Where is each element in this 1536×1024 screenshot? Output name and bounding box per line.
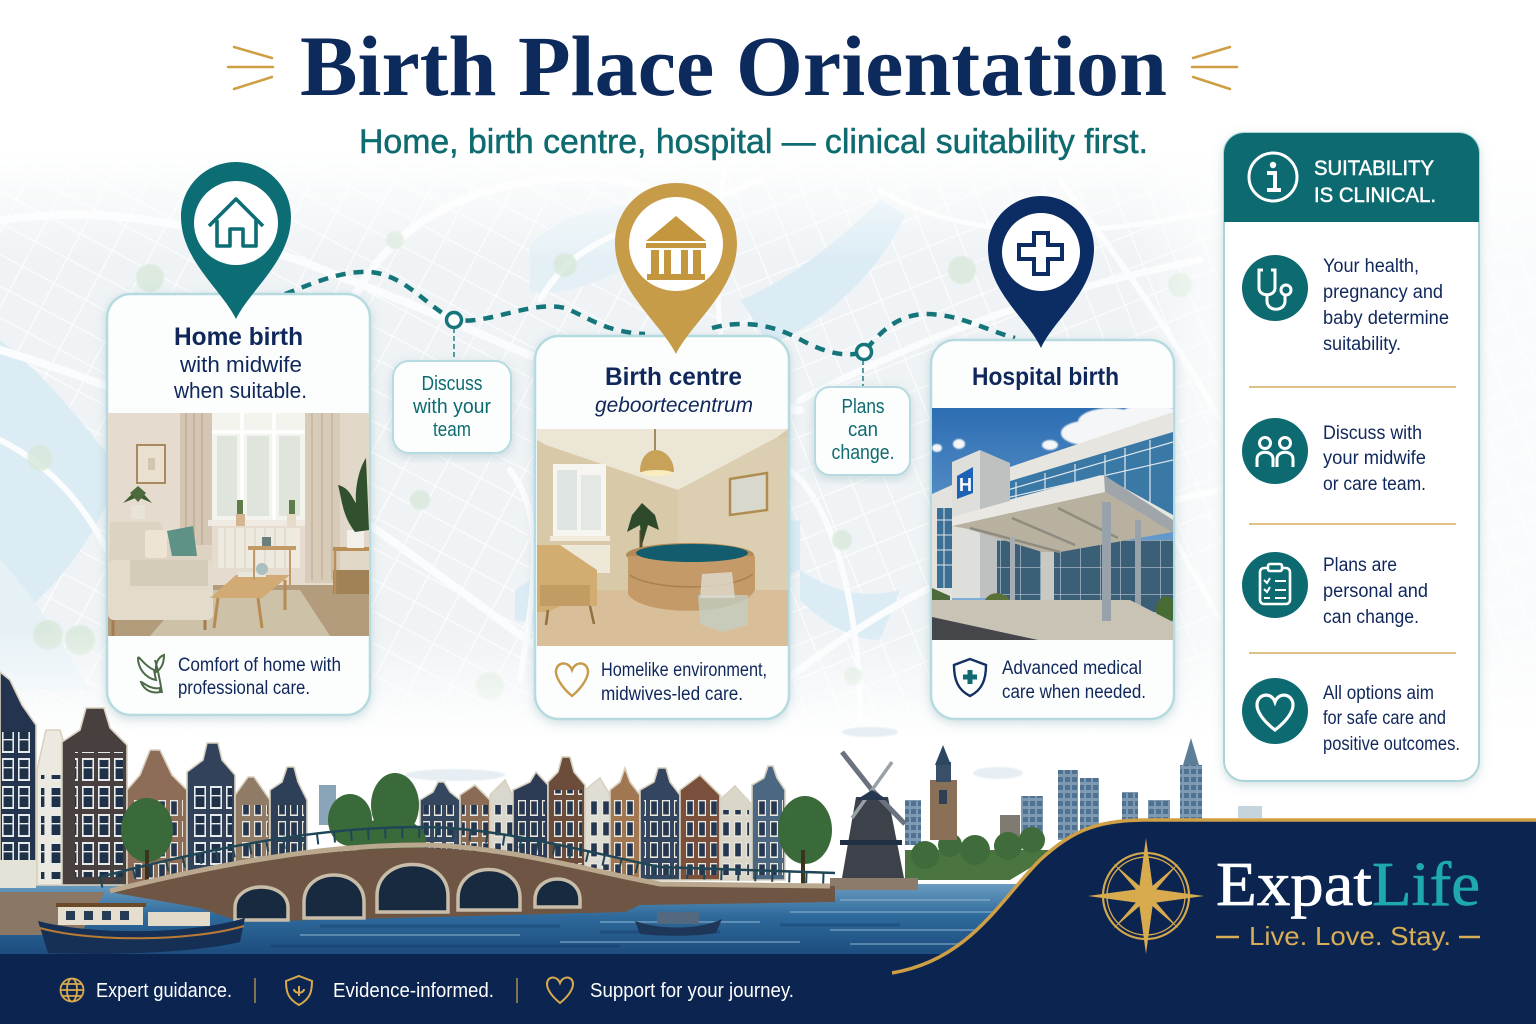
panel item: health: suitability. [1323, 334, 1401, 355]
panel item: discuss: Discuss with [1323, 423, 1422, 444]
footer divider [255, 978, 517, 1003]
illustration: quay left [0, 892, 105, 935]
panel header: SUITABILITY [1314, 156, 1434, 180]
logo: compass [1088, 838, 1204, 954]
callout: plans can change: can [848, 419, 878, 441]
home birth subheading: with midwife [179, 352, 302, 377]
callout: discuss with your team: Discuss [422, 373, 482, 395]
illustration: canal houses right row [420, 757, 785, 880]
columns [1102, 502, 1111, 600]
logo panel [892, 820, 1536, 1024]
illustration: small boat [635, 912, 722, 936]
icon: leaf sprig [138, 655, 164, 693]
panel item: plans: Plans are [1323, 555, 1397, 576]
upper glazed wing [992, 412, 1173, 520]
footer: evidence-informed [286, 976, 494, 1005]
icon: shield [286, 976, 312, 1005]
logo wordmark: Life [1372, 851, 1480, 919]
home birth note: Comfort of home with [178, 655, 341, 676]
callout: discuss with your team: with your [412, 396, 491, 418]
panel: birth centre [535, 336, 789, 719]
hospital birth note: care when needed. [1002, 682, 1146, 703]
ground [932, 600, 1173, 640]
footer: support [547, 977, 794, 1003]
panel item: safe care: All options aim [1323, 683, 1434, 704]
illustration: right bank trees [830, 827, 1060, 890]
icon: globe [60, 978, 84, 1002]
callout: discuss with your team: team [433, 419, 471, 441]
icon: heart [1242, 678, 1308, 744]
panel: home birth [107, 294, 370, 715]
photo: birth room with pool [537, 429, 788, 646]
map pin: birth centre [615, 183, 737, 354]
panel item: health [1242, 255, 1449, 355]
tower [952, 450, 980, 598]
route waypoint: discuss [446, 312, 462, 328]
callout: plans can change: Plans [842, 396, 884, 418]
panel item: safe care [1242, 678, 1460, 755]
illustration: canal houses left row [0, 672, 307, 888]
hospital birth note [954, 658, 1146, 703]
footer: expert guidance [60, 978, 232, 1002]
title: Birth Place Orientation [300, 18, 1167, 114]
birth centre note [556, 660, 767, 705]
route waypoint: plans [856, 344, 872, 360]
logo wordmark: Expat [1216, 851, 1372, 919]
illustration: houseboat [38, 903, 245, 954]
icon: medical cross [1019, 233, 1062, 274]
home birth note [138, 655, 341, 699]
footer: support: Support for your journey. [590, 980, 794, 1002]
icon: medical shield [954, 659, 986, 696]
canopy underside [952, 492, 1173, 552]
logo wordmark [1216, 851, 1480, 919]
icon: heart [547, 977, 573, 1003]
logo tagline: Live. Love. Stay. [1249, 921, 1451, 951]
home birth note: professional care. [178, 678, 310, 699]
home birth heading: Home birth [174, 323, 303, 351]
icon: heart outline [556, 663, 588, 696]
panel item: plans [1242, 552, 1428, 628]
map pin: hospital birth [988, 196, 1094, 348]
footer band [0, 954, 1536, 1024]
icon: house [209, 199, 263, 246]
illustration: windmill [840, 752, 905, 878]
panel header: IS CLINICAL. [1314, 183, 1436, 207]
panel item: safe care: for safe care and [1323, 708, 1446, 729]
photo: hospital building [932, 405, 1180, 640]
route: dashed path between locations [268, 272, 1015, 354]
route waypoint connector lines [454, 328, 863, 388]
home birth subheading [173, 352, 307, 403]
illustration: church tower [930, 745, 957, 840]
logo panel gold edge [892, 820, 1536, 973]
divider [1249, 387, 1456, 653]
panel item: discuss: your midwife [1323, 448, 1426, 469]
icon: info [1249, 153, 1297, 201]
entrance glazing [997, 540, 1173, 612]
hospital birth heading: Hospital birth [972, 363, 1119, 391]
panel item: safe care: positive outcomes. [1323, 734, 1460, 755]
map pin: home birth [181, 162, 291, 319]
panel item: discuss: or care team. [1323, 474, 1426, 495]
icon: people [1242, 418, 1308, 484]
footer: evidence-informed: Evidence-informed. [333, 980, 494, 1002]
callout: discuss with your team [393, 361, 511, 453]
panel item: health: Your health, [1323, 256, 1419, 277]
subtitle: Home, birth centre, hospital — clinical suitability first. [359, 123, 1148, 161]
birth centre heading: Birth centre [605, 363, 742, 391]
illustration: canal water [0, 884, 1080, 955]
illustration: arched bridge [100, 827, 835, 922]
hospital birth note: Advanced medical [1002, 658, 1142, 679]
panel item: discuss [1242, 418, 1426, 495]
illustration: trees [121, 773, 832, 890]
icon: clipboard [1242, 552, 1308, 618]
panel: hospital birth [931, 340, 1180, 719]
left wing [932, 485, 952, 600]
title decoration: left rays [228, 47, 273, 89]
illustration: distant skyline [319, 727, 1262, 850]
home birth subheading: when suitable. [173, 378, 307, 403]
birth centre note: Homelike environment, [601, 660, 767, 681]
callout: plans can change: change. [832, 442, 894, 464]
panel item: plans: personal and [1323, 581, 1428, 602]
birth centre note: midwives-led care. [601, 684, 743, 705]
footer: expert guidance: Expert guidance. [96, 980, 232, 1002]
photo: living room [108, 413, 369, 636]
panel header [1224, 133, 1479, 222]
callout: plans can change [815, 387, 910, 475]
icon: stethoscope [1242, 255, 1308, 321]
panel item: health: pregnancy and [1323, 282, 1443, 303]
shrubs [932, 588, 950, 600]
panel item: health: baby determine [1323, 308, 1449, 329]
panel: suitability is clinical [1224, 133, 1479, 781]
canopy slab [952, 475, 1104, 526]
panel item: plans: can change. [1323, 607, 1419, 628]
title decoration: right rays [1192, 47, 1237, 89]
icon: classical building [646, 216, 706, 280]
photo: hospital building: H [959, 475, 972, 495]
birth centre dutch term: geboortecentrum [595, 394, 753, 417]
